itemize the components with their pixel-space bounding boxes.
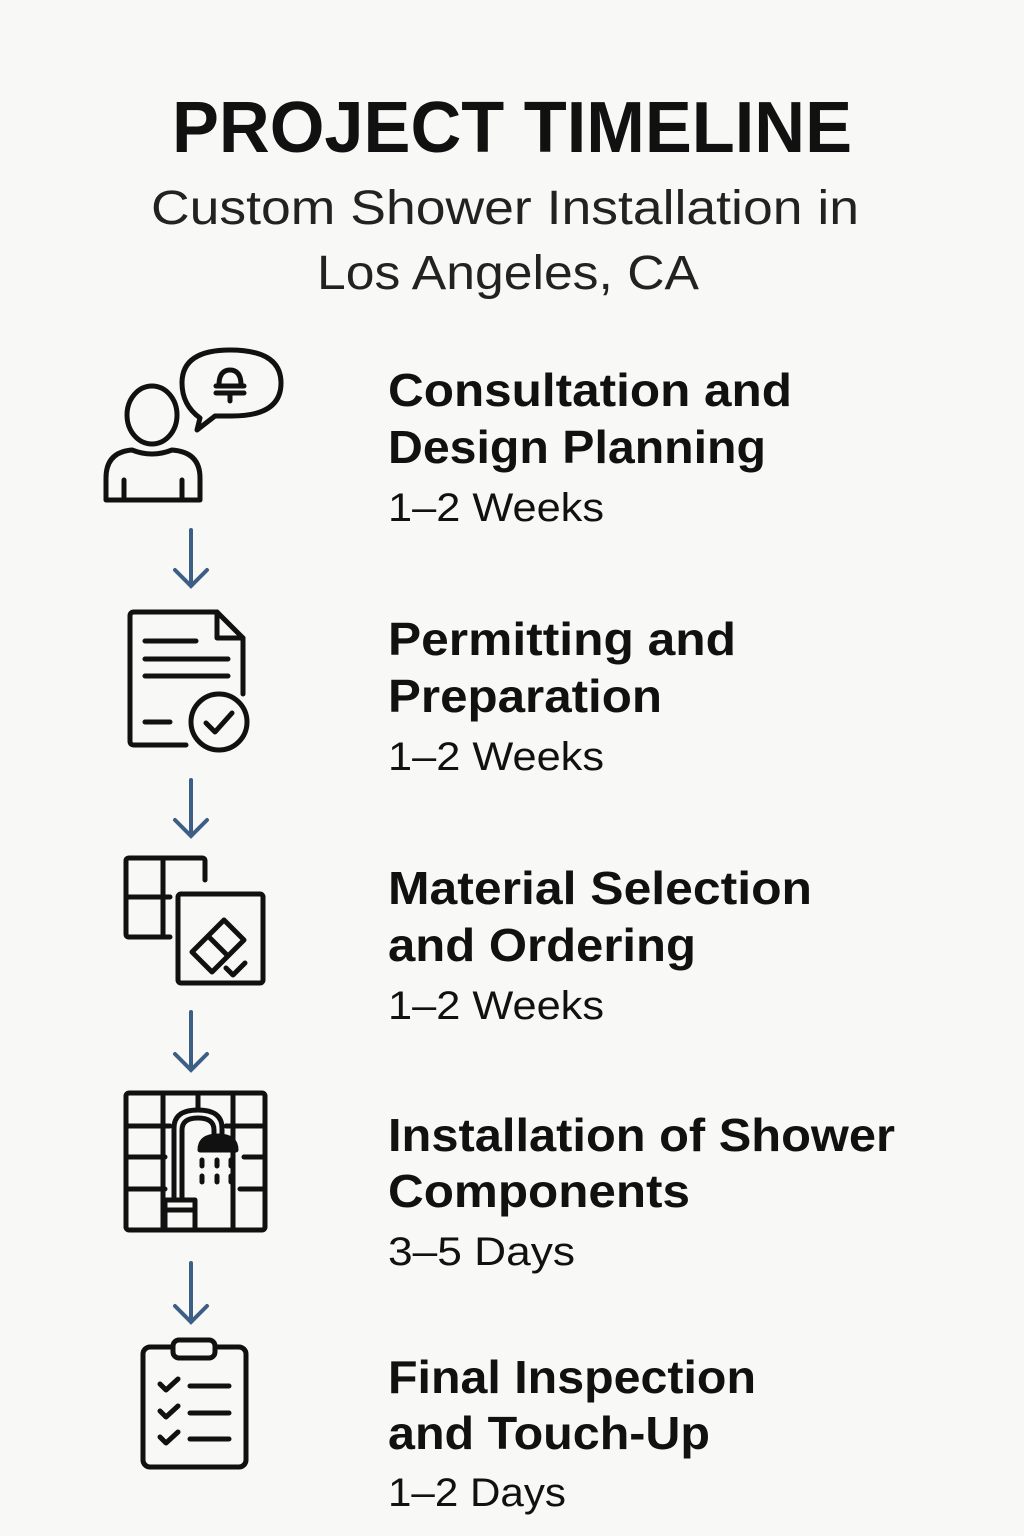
arrow 2 — [175, 780, 207, 836]
step 3 text: 1–2 Weeks — [388, 984, 604, 1028]
step 1 text: Consultation and — [388, 364, 792, 416]
step 4 text: Components — [388, 1165, 690, 1217]
step 5 text — [388, 1351, 756, 1515]
icon: consultation — [106, 350, 281, 500]
step 2 text: Permitting and — [388, 613, 736, 665]
step 1 text: Design Planning — [388, 421, 766, 473]
subtitle: Custom Shower Installation in — [151, 182, 859, 235]
icon: materials — [126, 858, 263, 983]
title: PROJECT TIMELINE — [172, 88, 852, 168]
icon: permit document — [130, 612, 247, 750]
step 3 text: Material Selection — [388, 862, 812, 914]
step 3 text: and Ordering — [388, 919, 696, 971]
step 3 text — [388, 862, 812, 1028]
step 5 text: and Touch-Up — [388, 1407, 710, 1459]
arrow 3 — [175, 1012, 207, 1070]
subtitle — [151, 182, 859, 300]
step 1 text: 1–2 Weeks — [388, 486, 604, 530]
step 5 text: 1–2 Days — [388, 1471, 566, 1515]
step 5 text: Final Inspection — [388, 1351, 756, 1403]
step 2 text: Preparation — [388, 670, 662, 722]
subtitle: Los Angeles, CA — [317, 247, 699, 300]
step 4 text: Installation of Shower — [388, 1109, 895, 1161]
step 2 text — [388, 613, 736, 779]
step 4 text — [388, 1109, 895, 1274]
step 2 text: 1–2 Weeks — [388, 735, 604, 779]
step 4 text: 3–5 Days — [388, 1230, 575, 1274]
icon: clipboard checklist — [143, 1340, 246, 1467]
arrow 4 — [175, 1263, 207, 1322]
step 1 text — [388, 364, 792, 530]
icon: shower — [126, 1093, 265, 1230]
arrow 1 — [175, 530, 207, 586]
